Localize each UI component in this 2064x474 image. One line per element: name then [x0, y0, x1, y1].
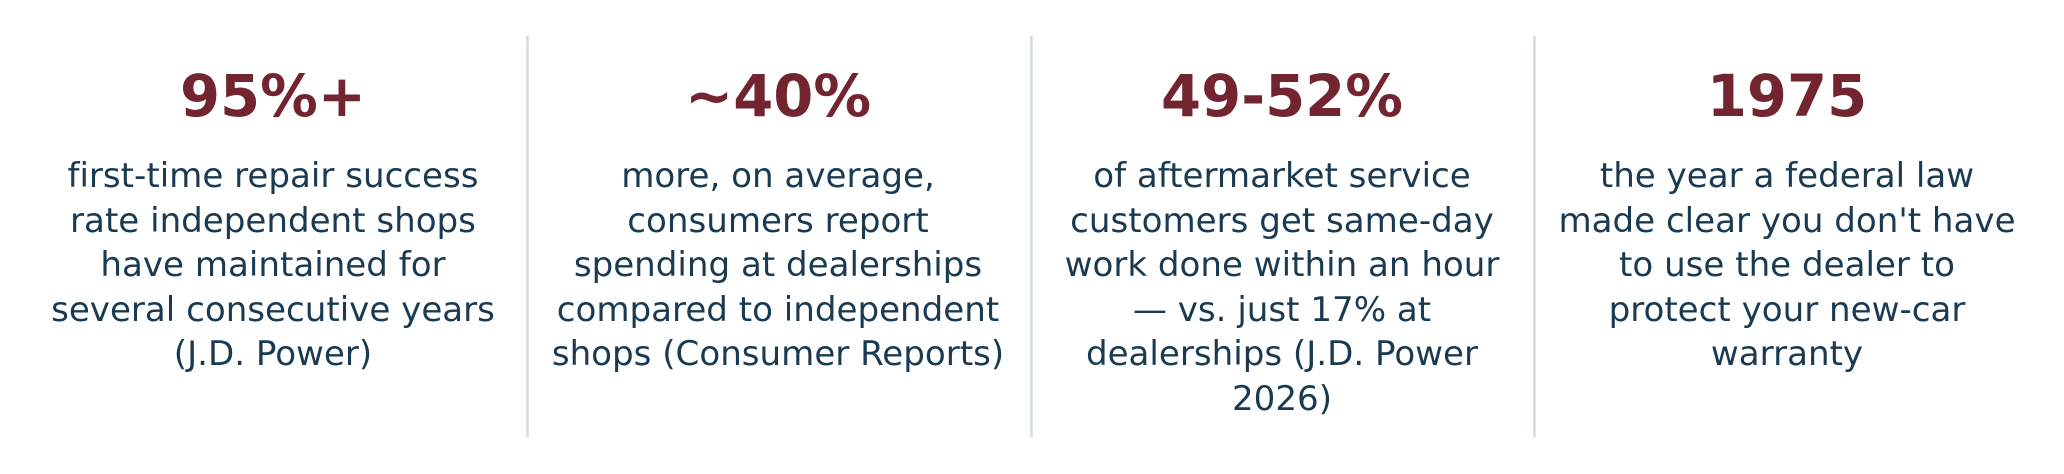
text: federal law description: protect your new-car	[1609, 290, 1965, 330]
stat: ~40%: ~40%	[685, 63, 871, 130]
text: dealership spending description: consumers report	[627, 201, 929, 241]
text: first-time repair description: rate independent shops	[70, 201, 476, 241]
panel: dealership spending stat	[552, 63, 1004, 374]
text: same-day service description: — vs. just 17% at	[1133, 290, 1431, 330]
text: same-day service description: customers get same-day	[1070, 201, 1494, 241]
text: same-day service description: of aftermarket service	[1093, 156, 1471, 196]
text: federal law description	[1558, 156, 2016, 374]
text: first-time repair description: (J.D. Power)	[174, 334, 372, 374]
text: dealership spending description	[552, 156, 1004, 374]
text: dealership spending description: shops (Consumer Reports)	[552, 334, 1004, 374]
text: first-time repair description: several consecutive years	[51, 290, 495, 330]
text: federal law description: the year a federal law	[1600, 156, 1974, 196]
text: dealership spending description: compared to independent	[557, 290, 999, 330]
text: dealership spending description: more, on average,	[621, 156, 935, 196]
panel: first-time repair success stat	[51, 63, 495, 374]
text: federal law description: made clear you don't have	[1558, 201, 2016, 241]
text: first-time repair description	[51, 156, 495, 374]
text: same-day service description: dealerships (J.D. Power	[1086, 334, 1478, 374]
text: same-day service description: 2026)	[1232, 379, 1332, 419]
text: federal law description: warranty	[1711, 334, 1863, 374]
panel: same-day service stat	[1065, 63, 1500, 419]
text: first-time repair description: first-time repair success	[67, 156, 479, 196]
stat: 1975: 1975	[1707, 63, 1867, 130]
stat: 95%+: 95%+	[180, 63, 366, 130]
text: federal law description: to use the dealer to	[1619, 245, 1955, 285]
stat: 49-52%: 49-52%	[1161, 63, 1403, 130]
panel: federal law stat	[1558, 63, 2016, 374]
text: first-time repair description: have maintained for	[100, 245, 446, 285]
text: same-day service description	[1065, 156, 1500, 419]
text: dealership spending description: spending at dealerships	[574, 245, 982, 285]
text: same-day service description: work done within an hour	[1065, 245, 1499, 285]
